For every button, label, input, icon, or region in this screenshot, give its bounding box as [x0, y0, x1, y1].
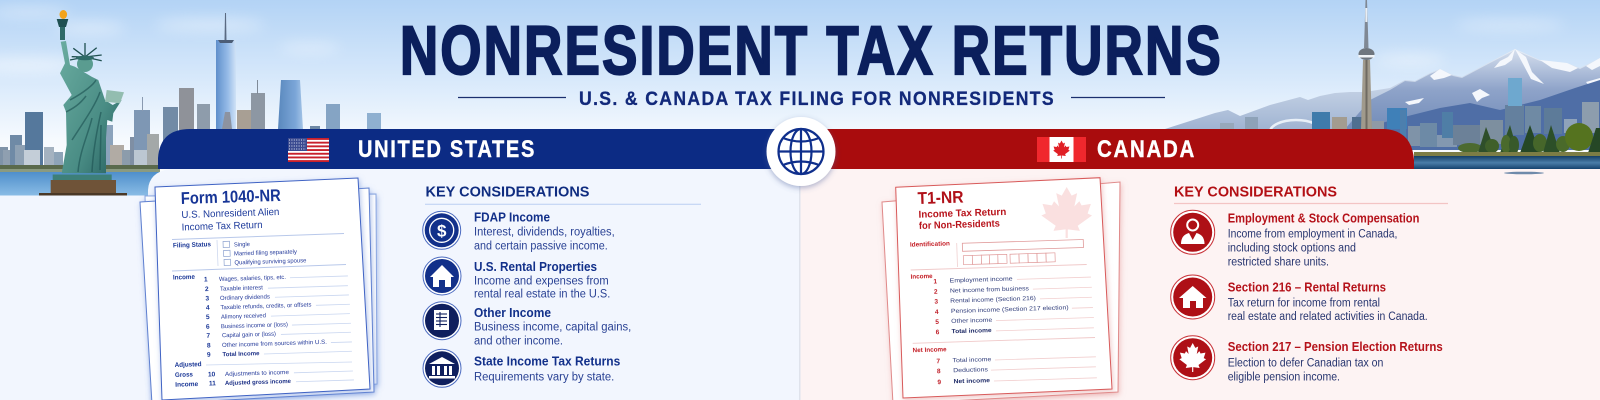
item: state income tax returns: State Income Tax Returns	[474, 354, 620, 369]
income lines: 5	[935, 319, 939, 326]
icon: CN Tower	[1358, 0, 1374, 129]
right mountains and skyline: Toronto	[1165, 49, 1600, 170]
income lines: Rental income (Section 216)	[950, 296, 1036, 305]
income lines: Net income from business	[950, 286, 1029, 295]
item: employment and stock compensation: Income from employment in Canada,	[1228, 229, 1397, 241]
item: section 217	[1171, 336, 1443, 384]
item: employment and stock compensation: Employment & Stock Compensation	[1228, 212, 1419, 226]
income lines: Total Income	[222, 351, 260, 358]
net income lines: 7	[936, 358, 941, 365]
key considerations: United States	[423, 185, 701, 387]
net income lines: Net Income	[913, 346, 947, 354]
identification	[910, 239, 1083, 267]
income lines: Income	[911, 273, 933, 281]
income lines: Other income	[951, 318, 993, 325]
icon: dollar: $	[437, 222, 447, 240]
income lines: Taxable refunds, credits, or offsets	[220, 302, 312, 311]
item: other income: and other income.	[474, 335, 563, 347]
icon: US flag	[288, 138, 329, 162]
icon: maple leaf watermark	[1041, 187, 1092, 238]
adjusted gross income: Adjustments to income	[225, 370, 290, 378]
identification: Identification	[910, 240, 950, 249]
heading: KEY CONSIDERATIONS	[1174, 185, 1337, 201]
filing status: Single	[234, 242, 251, 248]
income lines: 7	[206, 333, 211, 340]
adjusted gross income: 10	[208, 371, 216, 379]
title: NONRESIDENT TAX RETURNS	[400, 12, 1223, 89]
income lines: 2	[934, 289, 938, 296]
item: FDAP income: and certain passive income.	[474, 240, 608, 252]
income lines: Business income or (loss)	[221, 322, 288, 330]
band: United States	[158, 129, 801, 169]
item: employment and stock compensation: including stock options and	[1228, 243, 1356, 255]
income lines: Wages, salaries, tips, etc.	[219, 275, 286, 283]
income lines: 6	[206, 324, 210, 331]
form title: T1-NR	[917, 188, 964, 208]
form title: Income Tax Return	[918, 207, 1006, 221]
item: state income tax returns: Requirements vary by state.	[474, 371, 614, 383]
item: section 217: eligible pension income.	[1228, 372, 1340, 384]
item: FDAP income	[423, 210, 615, 252]
icon: bank	[423, 349, 461, 387]
item: U.S. rental properties: rental real estate in the U.S.	[474, 289, 610, 301]
item: other income: Other Income	[474, 305, 551, 320]
form title: Form 1040-NR	[181, 186, 281, 208]
heading: United States: UNITED STATES	[358, 136, 536, 163]
adjusted gross income: Gross	[175, 371, 193, 379]
income lines: 4	[206, 305, 210, 312]
item: section 216: Section 216 – Rental Returns	[1228, 280, 1386, 294]
item: U.S. rental properties	[423, 257, 610, 301]
icon: Statue of Liberty	[39, 10, 127, 196]
item: U.S. rental properties: Income and expenses from	[474, 275, 609, 287]
item: employment and stock compensation	[1171, 210, 1419, 269]
item: section 216	[1171, 275, 1428, 323]
filing status: Married filing separately	[234, 250, 297, 257]
icon: house	[1171, 275, 1215, 319]
form title: Income Tax Return	[181, 220, 263, 233]
item: FDAP income: Interest, dividends, royalties,	[474, 227, 615, 239]
filing status: Filing Status	[173, 241, 211, 249]
icon: globe	[766, 117, 836, 186]
income lines: Pension income (Section 217 election)	[951, 305, 1069, 315]
income lines: 8	[207, 342, 211, 349]
income lines	[173, 272, 352, 359]
icon: person	[1171, 210, 1215, 254]
form title: for Non-Residents	[919, 218, 1000, 232]
income lines: 9	[207, 352, 211, 359]
item: section 217: Election to defer Canadian tax on	[1228, 358, 1383, 370]
income lines: 3	[205, 295, 210, 302]
item: state income tax returns	[423, 349, 620, 387]
income lines: 4	[935, 309, 939, 316]
clouds	[0, 8, 1565, 72]
net income lines: Net income	[954, 378, 991, 385]
income lines: Taxable interest	[220, 285, 263, 293]
sky background	[0, 0, 1600, 200]
income lines: Income	[173, 274, 195, 281]
net income lines: 8	[937, 368, 941, 375]
icon: maple leaf	[1171, 336, 1215, 380]
icon: house	[423, 257, 461, 295]
net income lines: 9	[937, 379, 942, 386]
item: section 216: Tax return for income from rental	[1228, 297, 1380, 309]
income lines: 1	[204, 276, 208, 283]
income lines: Ordinary dividends	[220, 294, 270, 302]
filing status	[173, 240, 307, 266]
income lines: Alimony received	[221, 313, 266, 321]
band: Canada	[800, 129, 1414, 169]
heading: Canada: CANADA	[1097, 136, 1196, 163]
item: U.S. rental properties: U.S. Rental Properties	[474, 259, 597, 274]
income lines: 2	[205, 286, 209, 293]
right panel background	[800, 169, 1600, 400]
adjusted gross income: Income	[175, 381, 199, 389]
icon: Canadian flag	[1037, 137, 1086, 162]
form: 1040-NR	[140, 178, 377, 400]
heading: KEY CONSIDERATIONS	[426, 185, 590, 201]
item: FDAP income: FDAP Income	[474, 210, 550, 225]
adjusted gross income: Adjusted	[175, 361, 202, 369]
item: section 216: real estate and related activities in Canada.	[1228, 311, 1428, 323]
income lines: Other income from sources within U.S.	[222, 340, 327, 349]
income lines: Employment income	[950, 276, 1013, 284]
form title	[917, 188, 1006, 232]
item: other income	[423, 302, 631, 347]
income lines: Capital gain or (loss)	[222, 332, 276, 339]
icon: document	[423, 302, 461, 340]
adjusted gross income	[175, 361, 354, 389]
net income lines: Deductions	[953, 367, 988, 374]
income lines: 3	[934, 299, 939, 306]
left water	[0, 172, 160, 196]
income lines	[911, 273, 1094, 336]
income lines: 1	[933, 278, 938, 286]
icon: dollar	[423, 211, 461, 249]
left skyline: New York	[0, 13, 381, 172]
form title	[181, 186, 281, 233]
item: section 217: Section 217 – Pension Election Returns	[1228, 340, 1443, 354]
item: other income: Business income, capital gains,	[474, 322, 631, 334]
subtitle: U.S. & CANADA TAX FILING FOR NONRESIDENTS	[579, 88, 1055, 110]
filing status: Qualifying surviving spouse	[234, 258, 307, 266]
income lines: 5	[206, 314, 210, 321]
form title: U.S. Nonresident Alien	[181, 207, 280, 221]
net income lines: Total income	[953, 357, 992, 364]
left panel background	[148, 169, 800, 400]
income lines: 6	[936, 329, 940, 336]
key considerations: Canada	[1171, 185, 1448, 384]
item: employment and stock compensation: restricted share units.	[1228, 257, 1329, 269]
income lines: Total income	[952, 328, 992, 335]
form: T1-NR	[882, 178, 1120, 400]
net income lines	[913, 346, 1097, 386]
adjusted gross income: Adjusted gross income	[225, 379, 292, 387]
adjusted gross income: 11	[209, 380, 216, 388]
